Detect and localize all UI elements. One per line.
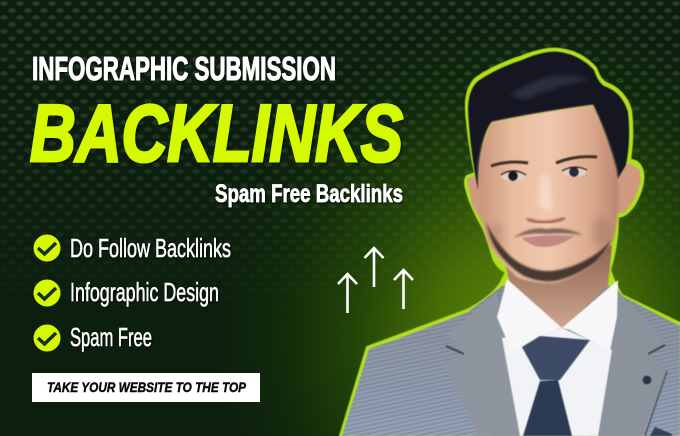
neck (504, 245, 612, 330)
button: take your website to the top (32, 373, 260, 402)
moustache (513, 228, 583, 238)
feature list (34, 233, 231, 352)
icon: up arrows (338, 248, 413, 313)
portrait glow outline (340, 49, 680, 436)
beard (486, 217, 612, 281)
ears (467, 163, 641, 222)
eyebrows (491, 157, 597, 166)
hair sheen (510, 75, 590, 100)
list item: infographic design (34, 277, 219, 307)
lips (522, 235, 574, 247)
list item: do follow backlinks (34, 233, 231, 263)
list item: infographic design: Infographic Design (70, 277, 219, 307)
list item: spam free: Spam Free (70, 322, 152, 352)
title: infographic submission: INFOGRAPHIC SUBMISSION (32, 50, 336, 87)
shirt collar (497, 279, 618, 353)
necktie (522, 336, 590, 436)
hair (468, 52, 629, 190)
subheading: spam free backlinks: Spam Free Backlinks (215, 180, 403, 208)
heading: backlinks: BACKLINKS (30, 89, 403, 179)
nose (527, 175, 565, 222)
eyes (501, 167, 587, 181)
list item: do follow backlinks: Do Follow Backlinks (70, 233, 231, 263)
suit lapels (445, 292, 672, 436)
list item: spam free (34, 322, 152, 352)
shirt (502, 328, 612, 436)
button: take your website to the top: TAKE YOUR WEBSITE TO THE TOP (47, 379, 247, 395)
face (478, 105, 619, 283)
portrait (340, 49, 680, 436)
suit jacket (342, 286, 680, 436)
